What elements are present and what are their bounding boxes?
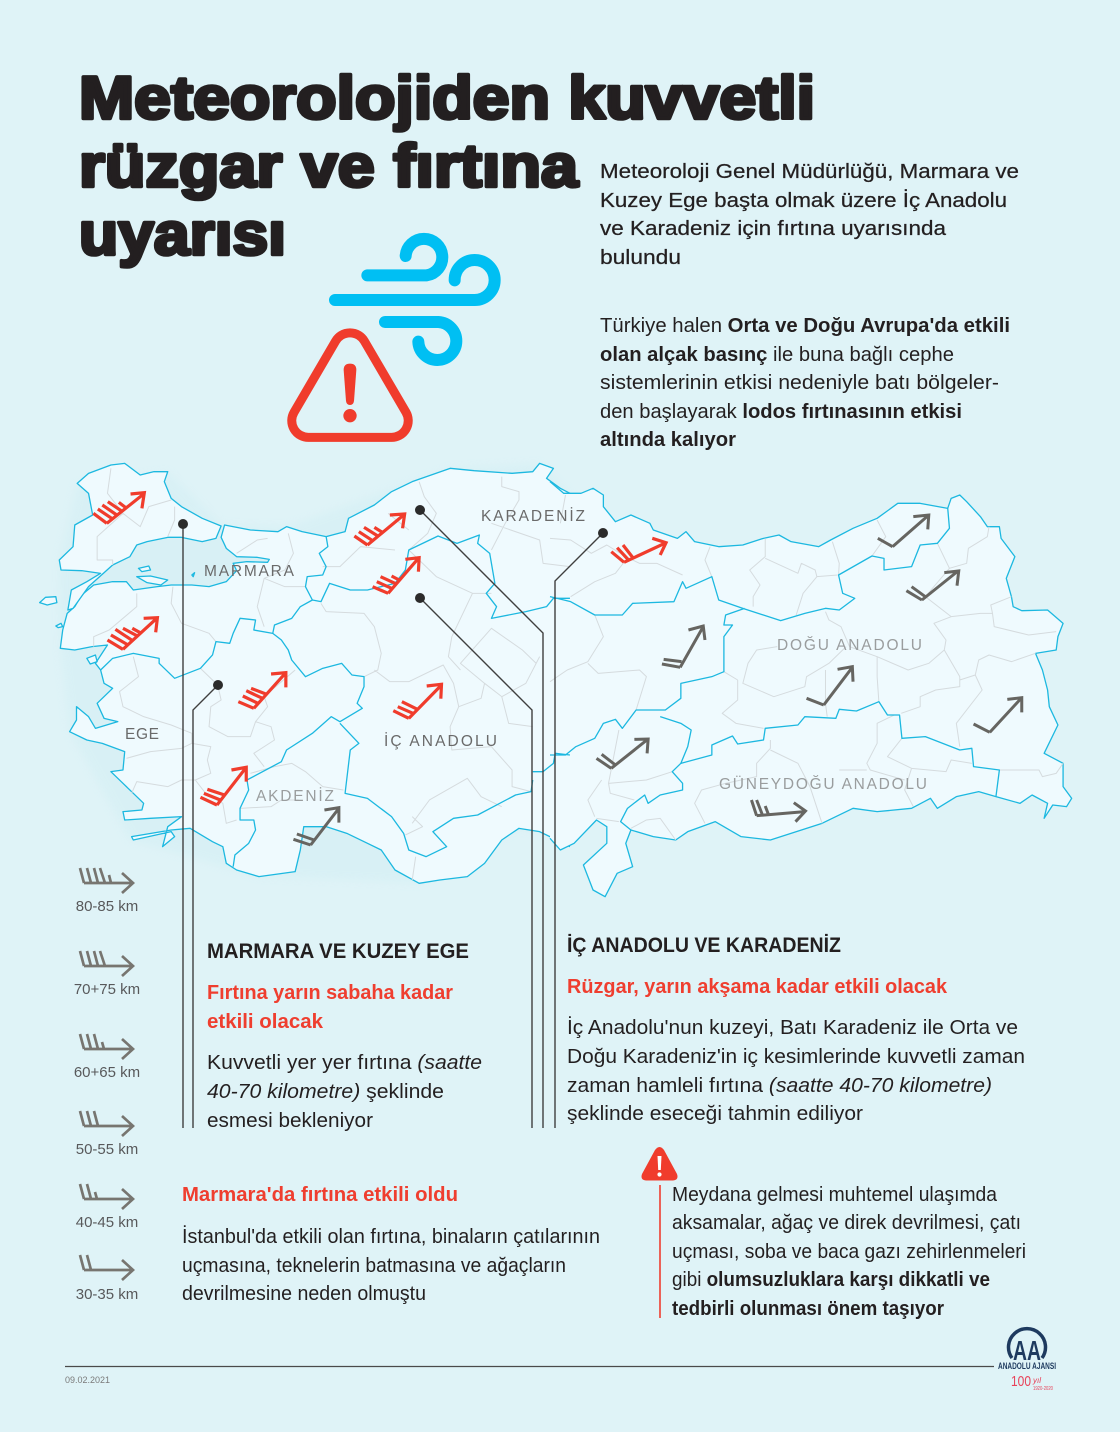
panel: İç Anadolu ve Karadeniz: Rüzgar, yarın akşama kadar etkili olacak	[567, 975, 948, 998]
body text: low pressure explanation: den başlayarak lodos fırtınasının etkisi	[600, 400, 962, 423]
title: rüzgar ve fırtına	[79, 132, 579, 200]
warning callout: Meydana gelmesi muhtemel ulaşımda	[672, 1183, 998, 1206]
warning callout	[660, 1183, 1026, 1320]
icon: wind	[335, 239, 495, 360]
provincial borders	[94, 468, 570, 880]
title: uyarısı	[79, 200, 286, 268]
icon: warning triangle	[292, 333, 408, 437]
panel: Marmara'da fırtına etkili oldu: İstanbul'da etkili olan fırtına, binaların çatılarının	[182, 1225, 600, 1248]
legend 40-45 km: 40-45 km	[76, 1214, 138, 1231]
legend 60+65 km	[74, 1034, 140, 1081]
body text: low pressure explanation: altında kalıyor	[600, 428, 736, 451]
intro text	[600, 160, 1019, 269]
warning callout: gibi olumsuzluklara karşı dikkatli ve	[672, 1268, 990, 1291]
legend 70+75 km: 70+75 km	[74, 981, 140, 998]
legend 60+65 km: 60+65 km	[74, 1064, 140, 1081]
title: Meteorolojiden kuvvetli	[79, 64, 815, 132]
warning callout: uçması, soba ve baca gazı zehirlenmeleri	[672, 1240, 1026, 1263]
region labels: KARADENİZ	[481, 507, 585, 525]
icon: small warning	[642, 1147, 678, 1180]
panel: İç Anadolu ve Karadeniz: şeklinde eseceği tahmin ediliyor	[567, 1102, 863, 1125]
wind arrows: west	[93, 493, 441, 845]
title	[79, 64, 815, 268]
region labels: EGE	[125, 726, 159, 743]
legend 50-55 km: 50-55 km	[76, 1141, 138, 1158]
panel: İç Anadolu ve Karadeniz	[567, 934, 1025, 1125]
land: west half	[40, 463, 570, 883]
region labels	[125, 507, 927, 805]
warning callout: aksamalar, ağaç ve direk devrilmesi, çatı	[672, 1211, 1021, 1234]
intro text: Meteoroloji Genel Müdürlüğü, Marmara ve	[600, 160, 1019, 183]
panel: İç Anadolu ve Karadeniz: İÇ ANADOLU VE KARADENİZ	[567, 934, 841, 957]
region labels: DOĞU ANADOLU	[777, 637, 922, 654]
body text: low pressure explanation: olan alçak basınç ile buna bağlı cephe	[600, 343, 954, 366]
panel: Marmara'da fırtına etkili oldu	[182, 1183, 600, 1305]
body text: low pressure explanation	[600, 314, 1010, 451]
body text: low pressure explanation: Türkiye halen Orta ve Doğu Avrupa'da etkili	[600, 314, 1010, 337]
body text: low pressure explanation: sistemlerinin etkisi nedeniyle batı bölgeler-	[600, 371, 999, 394]
panel: Marmara ve Kuzey Ege: 40-70 kilometre) şeklinde	[207, 1080, 444, 1103]
wind arrows: east	[596, 515, 1022, 822]
panel: Marmara ve Kuzey Ege: Kuvvetli yer yer fırtına (saatte	[207, 1051, 482, 1074]
region labels: GÜNEYDOĞU ANADOLU	[719, 775, 927, 793]
legend 30-35 km	[76, 1255, 138, 1303]
map of Turkey	[40, 463, 1072, 897]
panel: Marmara'da fırtına etkili oldu: uçmasına, teknelerin batmasına ve ağaçların	[182, 1254, 566, 1277]
panel: Marmara ve Kuzey Ege: esmesi bekleniyor	[207, 1109, 373, 1132]
panel: Marmara'da fırtına etkili oldu: devrilmesine neden olmuştu	[182, 1282, 426, 1305]
logo: Anadolu Ajansı: ANADOLU AJANSI	[998, 1361, 1056, 1372]
intro text: Kuzey Ege başta olmak üzere İç Anadolu	[600, 189, 1007, 212]
logo: Anadolu Ajansı: AA	[1013, 1335, 1041, 1366]
logo: Anadolu Ajansı: 1920-2020	[1033, 1386, 1053, 1392]
region labels: AKDENİZ	[256, 787, 334, 805]
region labels: İÇ ANADOLU	[384, 732, 497, 750]
panel: Marmara'da fırtına etkili oldu: Marmara'da fırtına etkili oldu	[182, 1183, 458, 1206]
panel: Marmara ve Kuzey Ege: etkili olacak	[207, 1010, 324, 1033]
legend 50-55 km	[76, 1111, 138, 1158]
legend 80-85 km	[76, 868, 138, 915]
region labels: MARMARA	[204, 563, 295, 580]
legend 70+75 km	[74, 951, 140, 998]
legend 80-85 km: 80-85 km	[76, 898, 138, 915]
panel: İç Anadolu ve Karadeniz: zaman hamleli fırtına (saatte 40-70 kilometre)	[567, 1074, 992, 1097]
legend 40-45 km	[76, 1184, 138, 1231]
soft sea glow	[59, 463, 570, 883]
panel: Marmara ve Kuzey Ege: MARMARA VE KUZEY EGE	[207, 940, 469, 963]
connector lines	[178, 505, 608, 1128]
land: east half	[550, 482, 1072, 897]
logo: Anadolu Ajansı: 100	[1011, 1373, 1031, 1390]
panel: Marmara ve Kuzey Ege: Fırtına yarın sabaha kadar	[207, 981, 453, 1004]
warning callout: tedbirli olunması önem taşıyor	[672, 1297, 944, 1320]
intro text: ve Karadeniz için fırtına uyarısında	[600, 217, 947, 240]
legend 30-35 km: 30-35 km	[76, 1286, 138, 1303]
legend: wind speed scale	[74, 868, 140, 1303]
panel: İç Anadolu ve Karadeniz: İç Anadolu'nun kuzeyi, Batı Karadeniz ile Orta ve	[567, 1016, 1018, 1039]
logo: Anadolu Ajansı	[998, 1329, 1056, 1392]
intro text: bulundu	[600, 246, 681, 269]
regional borders	[101, 535, 570, 867]
panel: İç Anadolu ve Karadeniz: Doğu Karadeniz'in iç kesimlerinde kuvvetli zaman	[567, 1045, 1025, 1068]
panel: Marmara ve Kuzey Ege	[207, 940, 482, 1132]
logo: Anadolu Ajansı: yıl	[1032, 1376, 1041, 1385]
footer line and date: 09.02.2021	[65, 1375, 110, 1385]
